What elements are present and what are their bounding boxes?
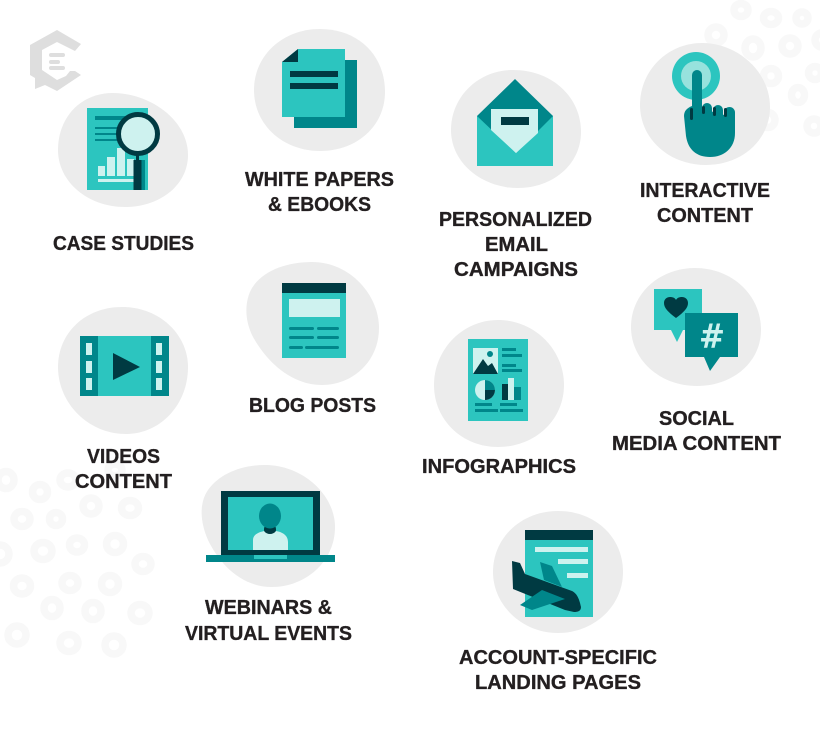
label: CASE STUDIES [53, 233, 194, 255]
panel: blog posts [246, 262, 379, 417]
icon: report with magnifier [87, 108, 158, 190]
icon: open envelope [477, 79, 553, 166]
label: WEBINARS & [205, 597, 332, 619]
label: CONTENT [75, 471, 172, 493]
icon: chat bubbles with heart and hash: # [699, 317, 725, 357]
label: VIRTUAL EVENTS [185, 623, 352, 645]
label [612, 408, 781, 455]
blob background [493, 511, 623, 633]
panel: interactive content [640, 43, 770, 227]
panel: infographics [422, 320, 576, 478]
label: EMAIL [485, 234, 548, 256]
label: LANDING PAGES [475, 672, 641, 694]
panel: videos content [58, 307, 188, 493]
icon: web page [282, 283, 346, 358]
label [245, 169, 394, 216]
icon: film strip with play button [80, 336, 169, 396]
label [459, 647, 657, 694]
label: & EBOOKS [268, 194, 371, 216]
icon: pointing hand [672, 52, 735, 157]
label: WHITE PAPERS [245, 169, 394, 191]
label: VIDEOS [87, 446, 160, 468]
blob background [451, 70, 581, 188]
blob background [246, 262, 379, 385]
panel: white papers and ebooks [245, 29, 394, 216]
blob background [58, 93, 188, 207]
blob background [631, 268, 761, 386]
icon: stacked pages [282, 49, 357, 128]
label [185, 597, 352, 645]
blob background [434, 320, 564, 447]
label: MEDIA CONTENT [612, 433, 781, 455]
panel: webinars and virtual events [185, 465, 352, 645]
blob background [202, 465, 335, 587]
label: CONTENT [657, 205, 753, 227]
blob background [58, 307, 188, 434]
blob background [254, 29, 385, 151]
blob background [640, 43, 770, 165]
label [640, 180, 770, 227]
icon: chat bubbles with heart and hash [654, 289, 738, 371]
label [75, 446, 172, 493]
panel: account-specific landing pages [459, 511, 657, 694]
label: ACCOUNT-SPECIFIC [459, 647, 657, 669]
logo [30, 30, 81, 91]
label: CAMPAIGNS [454, 259, 578, 281]
panel: social media content [612, 268, 781, 455]
label: INTERACTIVE [640, 180, 770, 202]
icon: infographic sheet [468, 339, 528, 421]
label: SOCIAL [659, 408, 734, 430]
icon: laptop with presenter [206, 491, 335, 562]
panel: case studies [53, 93, 194, 255]
icon: landing page with plane [512, 530, 593, 617]
panel: personalized email campaigns [439, 70, 592, 281]
label: PERSONALIZED [439, 209, 592, 231]
label [439, 209, 592, 281]
label: INFOGRAPHICS [422, 456, 576, 478]
label: BLOG POSTS [249, 395, 376, 417]
